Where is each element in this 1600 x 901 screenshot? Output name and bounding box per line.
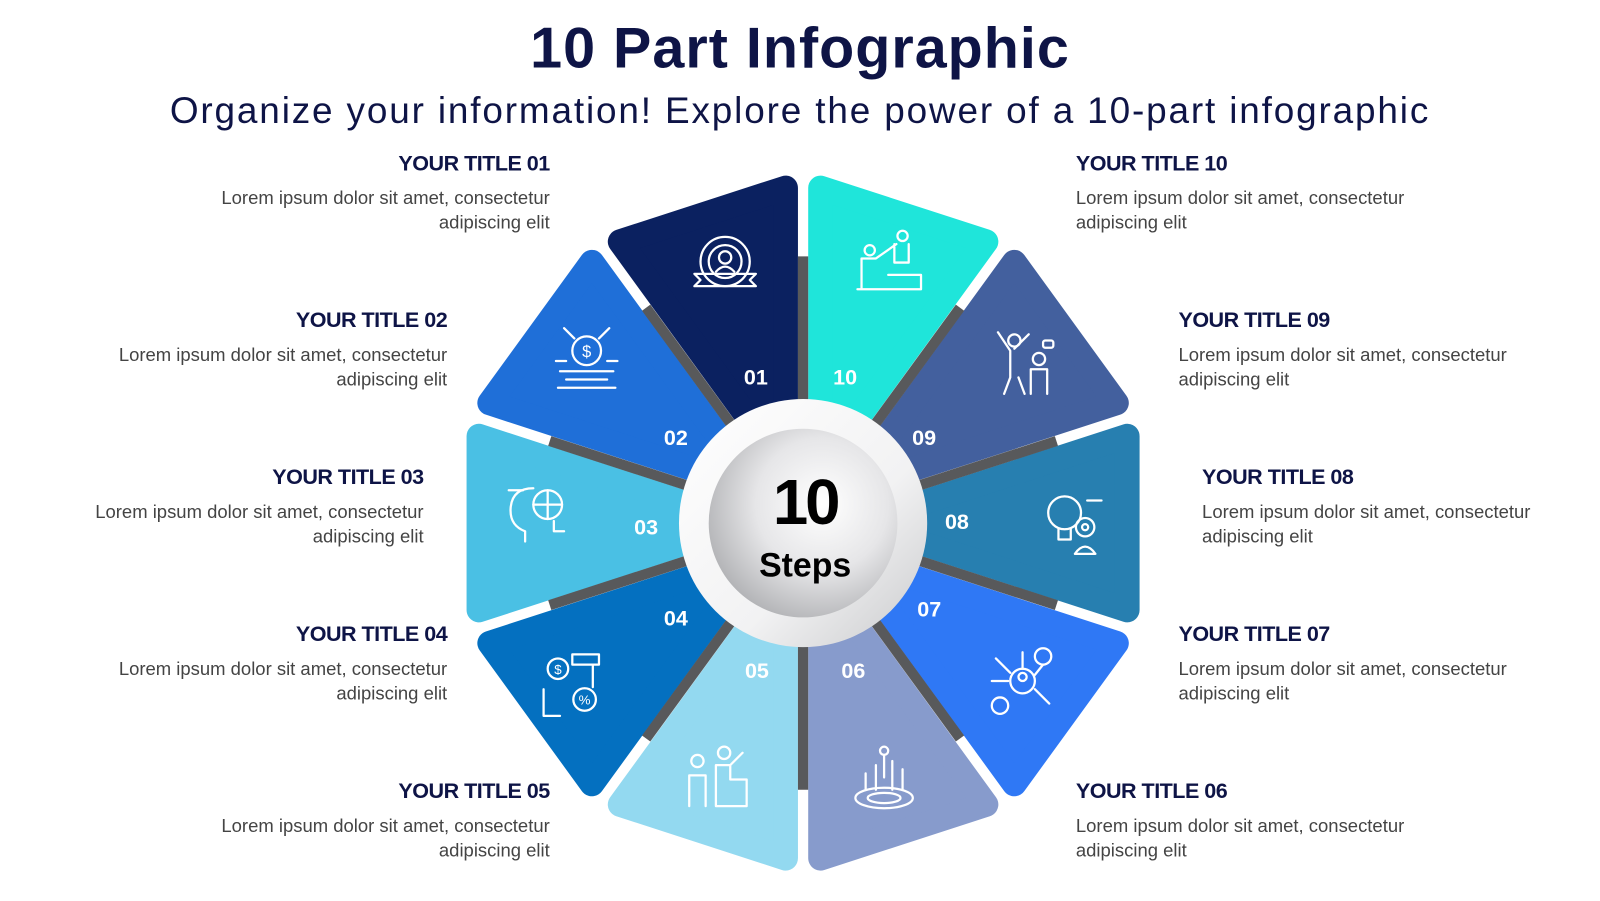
icon: money target: $ (582, 343, 591, 361)
text block 10: YOUR TITLE 10 (1076, 152, 1227, 175)
text block 03: YOUR TITLE 03 (272, 466, 424, 489)
text block 09 (1178, 309, 1507, 390)
text block 04: YOUR TITLE 04 (296, 623, 447, 646)
icons (509, 231, 1102, 808)
icon: money target (556, 328, 617, 388)
text block 09: adipiscing elit (1178, 369, 1289, 390)
text block 02: Lorem ipsum dolor sit amet, consectetur (119, 345, 447, 365)
text block 06: Lorem ipsum dolor sit amet, consectetur (1076, 815, 1404, 836)
segment 01 (620, 188, 786, 469)
segment 09 (849, 262, 1117, 490)
segment 08 (859, 436, 1127, 610)
text block 10: adipiscing elit (1076, 212, 1187, 233)
text block 07: Lorem ipsum dolor sit amet, consectetur (1178, 658, 1507, 679)
text block 08: YOUR TITLE 08 (1202, 466, 1353, 489)
text block 03: adipiscing elit (313, 526, 424, 547)
step numbers: 06 (841, 659, 865, 683)
text block 08: Lorem ipsum dolor sit amet, consectetur (1202, 502, 1530, 522)
text block 01: adipiscing elit (439, 212, 550, 233)
center circle (679, 399, 927, 647)
text block 07: adipiscing elit (1178, 683, 1289, 704)
icon: award badge (694, 237, 756, 286)
text block 07 (1178, 623, 1507, 704)
icon: target chart (855, 747, 913, 808)
step numbers (634, 366, 969, 683)
text block 05: Lorem ipsum dolor sit amet, consectetur (221, 815, 550, 836)
icon: helping up (857, 231, 921, 289)
text block 10 (1076, 152, 1404, 233)
icon: hands money: $ (554, 662, 562, 677)
text block 10: Lorem ipsum dolor sit amet, consectetur (1076, 188, 1404, 208)
text block 06 (1076, 779, 1404, 861)
step numbers: 08 (945, 510, 969, 534)
text block 08: adipiscing elit (1202, 526, 1313, 547)
icon: hands money (544, 654, 599, 716)
text block 09: Lorem ipsum dolor sit amet, consectetur (1178, 345, 1507, 365)
subtitle: Organize your information! Explore the power of a 10-part infographic (170, 89, 1430, 131)
step numbers: 07 (917, 597, 941, 621)
segment 03 (479, 436, 747, 610)
text block 02: YOUR TITLE 02 (296, 309, 447, 332)
text block 02: adipiscing elit (336, 369, 447, 390)
center circle: Steps (759, 546, 851, 584)
segment 05 (620, 577, 786, 858)
icon: people pointing (689, 747, 747, 806)
step numbers: 01 (744, 366, 768, 390)
text block 04: Lorem ipsum dolor sit amet, consectetur (119, 658, 447, 679)
text block 06: adipiscing elit (1076, 840, 1187, 861)
segment 07 (849, 556, 1117, 784)
text block 01 (221, 152, 550, 233)
icon: hands money: % (579, 693, 591, 708)
text block 04: adipiscing elit (336, 683, 447, 704)
text block 01: Lorem ipsum dolor sit amet, consectetur (221, 188, 550, 208)
step numbers: 05 (745, 659, 769, 683)
segment 06 (821, 577, 986, 858)
title: 10 Part Infographic (530, 15, 1070, 80)
center circle: 10 (773, 467, 838, 538)
text block 09: YOUR TITLE 09 (1178, 309, 1330, 332)
text block 05 (221, 779, 550, 861)
text block 06: YOUR TITLE 06 (1076, 779, 1227, 803)
text block 02 (119, 309, 447, 390)
icon: bulb gear person (1048, 496, 1102, 554)
step numbers: 09 (912, 426, 936, 450)
text block 03 (95, 466, 424, 547)
text block 08 (1202, 466, 1530, 547)
step numbers: 10 (833, 366, 857, 390)
step numbers: 04 (664, 607, 688, 631)
segment 10 (821, 188, 986, 469)
text block 05: adipiscing elit (439, 840, 550, 861)
icon: head globe (509, 488, 564, 542)
text block 04 (119, 623, 448, 704)
text block 03: Lorem ipsum dolor sit amet, consectetur (95, 502, 424, 522)
icon: network people (992, 648, 1051, 714)
segment 02 (490, 262, 757, 490)
segment 04 (490, 556, 757, 784)
text block 07: YOUR TITLE 07 (1178, 623, 1330, 646)
text block 05: YOUR TITLE 05 (398, 779, 550, 803)
step numbers: 02 (664, 426, 688, 450)
step numbers: 03 (634, 515, 658, 539)
icon: people celebrating (998, 332, 1053, 394)
text block 01: YOUR TITLE 01 (398, 152, 550, 175)
